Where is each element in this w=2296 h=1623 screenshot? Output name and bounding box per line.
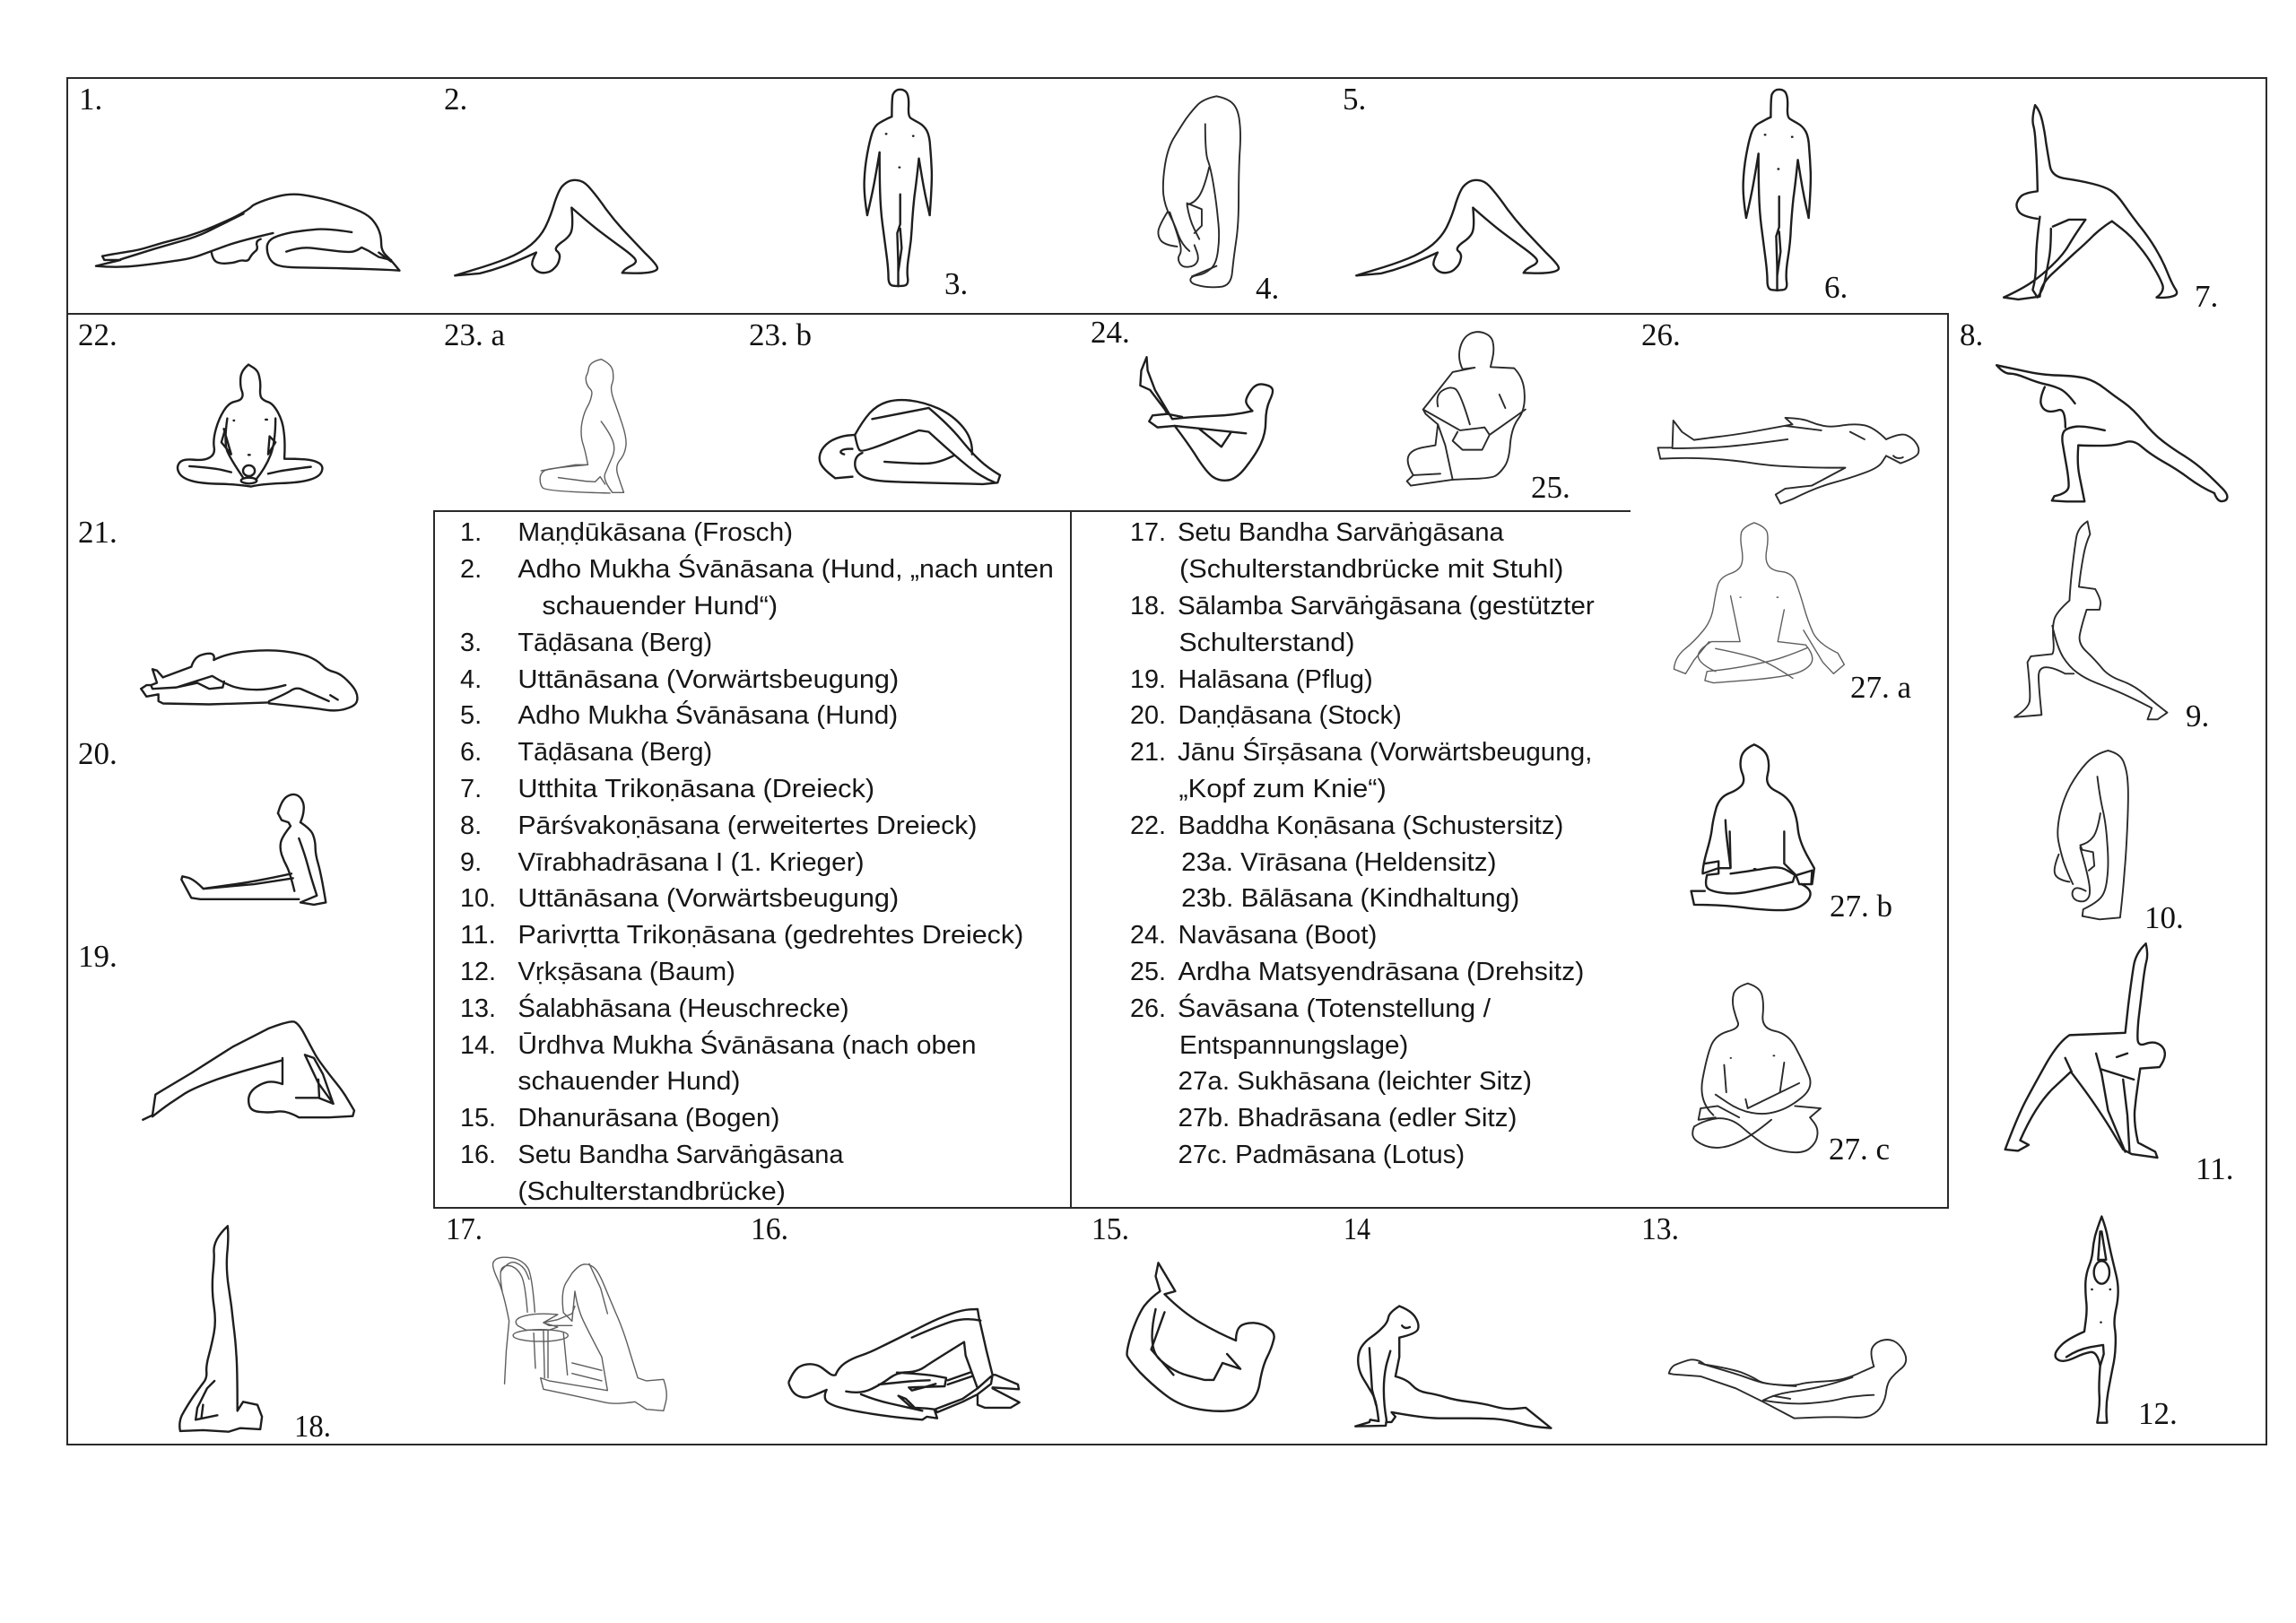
legend column right: (Schulterstandbrücke mit Stuhl): [1179, 555, 1563, 584]
figure 11: Parivrtta Trikonasana: [2005, 943, 2165, 1158]
legend column right: 18.: [1130, 592, 1166, 621]
legend column right: Baddha Koṇāsana (Schustersitz): [1178, 812, 1563, 840]
label 11: 11.: [2196, 1151, 2233, 1186]
figure 8: Parsvakonasana: [1996, 365, 2227, 501]
legend column left: Adho Mukha Śvānāsana (Hund, „nach unten: [517, 553, 1054, 584]
legend column left: 2.: [460, 555, 482, 584]
legend column left: 6.: [460, 738, 482, 767]
legend column left: Utthita Trikoṇāsana (Dreieck): [517, 775, 874, 803]
figure 23b: Balasana: [820, 400, 1000, 484]
legend column left: schauender Hund“): [542, 592, 778, 621]
legend column left: Parivṛtta Trikoṇāsana (gedrehtes Dreieck): [517, 921, 1023, 950]
figure 20: Dandasana: [181, 794, 326, 905]
label 15: 15.: [1091, 1211, 1129, 1246]
figure 14: Urdhva Mukha Svanasana: [1355, 1306, 1551, 1428]
figure 23a: Virasana: [540, 360, 626, 493]
label 18: 18.: [294, 1409, 331, 1444]
label 16: 16.: [751, 1211, 788, 1246]
figure 7: Utthita Trikonasana: [2004, 105, 2177, 299]
legend column right: Daṇḍāsana (Stock): [1178, 701, 1402, 730]
label 26: 26.: [1641, 317, 1681, 352]
legend column left: Vṛkṣāsana (Baum): [517, 958, 735, 986]
legend column left: 11.: [460, 921, 496, 950]
legend column right: Ardha Matsyendrāsana (Drehsitz): [1178, 958, 1584, 986]
legend column right: 20.: [1130, 701, 1166, 730]
legend column right: 23a. Vīrāsana (Heldensitz): [1181, 848, 1496, 877]
figure 16: Setu Bandha Sarvangasana: [788, 1309, 1020, 1419]
label 25: 25.: [1531, 470, 1570, 505]
legend column left: 12.: [460, 958, 496, 986]
label 14: 14: [1344, 1211, 1370, 1246]
label 27c: 27. c: [1829, 1132, 1890, 1167]
legend column right: 19.: [1130, 665, 1166, 694]
legend column left: 4.: [460, 665, 482, 694]
legend column right: 26.: [1130, 994, 1166, 1023]
legend column right: Schulterstand): [1178, 629, 1354, 657]
figure 27c: Padmasana: [1692, 984, 1821, 1152]
label 13: 13.: [1641, 1211, 1679, 1246]
label 23b: 23. b: [749, 317, 812, 352]
legend column right: 27b. Bhadrāsana (edler Sitz): [1178, 1104, 1517, 1133]
legend column left: Pārśvakoṇāsana (erweitertes Dreieck): [517, 812, 977, 840]
legend column left: 7.: [460, 775, 482, 803]
figure 10: Uttanasana: [2055, 751, 2128, 919]
legend column right: [1130, 518, 1595, 1169]
label 9: 9.: [2186, 699, 2209, 733]
label 20: 20.: [78, 736, 117, 771]
label 4: 4.: [1256, 271, 1279, 306]
legend column right: 23b. Bālāsana (Kindhaltung): [1181, 884, 1519, 913]
figure 9: Virabhadrasana I: [2014, 521, 2167, 719]
label 24: 24.: [1091, 315, 1130, 350]
legend column right: 21.: [1130, 738, 1166, 767]
label 27b: 27. b: [1830, 889, 1892, 924]
legend column left: Uttānāsana (Vorwärtsbeugung): [517, 884, 899, 913]
figure 4: Uttanasana: [1158, 96, 1240, 287]
figure 26: Savasana: [1658, 418, 1918, 504]
legend column right: Jānu Śīrṣāsana (Vorwärtsbeugung,: [1178, 736, 1592, 767]
legend column left: 13.: [460, 994, 496, 1023]
figure 13: Salabhasana: [1669, 1340, 1906, 1419]
label 27a: 27. a: [1850, 670, 1912, 705]
panel: legend of asana names: [460, 518, 1595, 1206]
label 23a: 23. a: [444, 317, 506, 352]
legend column right: Navāsana (Boot): [1178, 921, 1377, 950]
label 21: 21.: [78, 515, 117, 550]
legend column left: (Schulterstandbrücke): [517, 1177, 786, 1206]
legend column left: Adho Mukha Śvānāsana (Hund): [517, 699, 898, 730]
legend column left: Śalabhāsana (Heuschrecke): [517, 993, 849, 1023]
figure 2: Adho Mukha Svanasana: [455, 180, 657, 275]
legend column left: Uttānāsana (Vorwärtsbeugung): [517, 665, 899, 694]
legend column left: Maṇḍūkāsana (Frosch): [517, 518, 793, 547]
legend column left: 16.: [460, 1141, 496, 1169]
legend column left: Dhanurāsana (Bogen): [517, 1104, 779, 1133]
legend column right: Setu Bandha Sarvāṅgāsana: [1178, 518, 1505, 547]
legend column right: Halāsana (Pflug): [1178, 665, 1373, 694]
legend column right: „Kopf zum Knie“): [1178, 775, 1387, 803]
label 6: 6.: [1824, 270, 1848, 305]
legend column left: 5.: [460, 701, 482, 730]
legend column right: Entspannungslage): [1179, 1031, 1408, 1060]
legend column left: Ūrdhva Mukha Śvānāsana (nach oben: [517, 1029, 976, 1060]
figure 3: Tadasana: [865, 90, 932, 286]
figure 25: Ardha Matsyendrasana: [1407, 332, 1526, 486]
legend column left: 15.: [460, 1104, 496, 1133]
figure 19: Halasana: [143, 1021, 354, 1120]
legend column left: Vīrabhadrāsana I (1. Krieger): [517, 848, 865, 877]
legend column left: Setu Bandha Sarvāṅgāsana: [517, 1141, 844, 1169]
legend column left: 10.: [460, 884, 496, 913]
legend column left: [460, 518, 1054, 1206]
figure 27b: Bhadrasana: [1692, 744, 1814, 910]
figure 18: Salamba Sarvangasana: [179, 1226, 262, 1432]
label 17: 17.: [446, 1211, 483, 1246]
label 22: 22.: [78, 317, 117, 352]
legend column right: Śavāsana (Totenstellung /: [1178, 993, 1492, 1023]
label 12: 12.: [2138, 1396, 2178, 1431]
legend column left: schauender Hund): [517, 1067, 740, 1096]
legend column right: 24.: [1130, 921, 1166, 950]
legend column right: 17.: [1130, 518, 1166, 547]
label 2: 2.: [444, 82, 467, 117]
label 8: 8.: [1960, 317, 1983, 352]
figure 24: Navasana: [1140, 357, 1273, 481]
figure 6: Tadasana: [1744, 90, 1811, 291]
figure 27a: Sukhasana: [1674, 523, 1844, 683]
figure 15: Dhanurasana: [1127, 1263, 1274, 1411]
figure 21: Janu Sirsasana: [141, 650, 357, 710]
figure 5: Adho Mukha Svanasana: [1356, 180, 1559, 275]
legend column left: 3.: [460, 629, 482, 657]
legend column left: 14.: [460, 1031, 496, 1060]
legend column right: 22.: [1130, 812, 1166, 840]
legend column right: Sālamba Sarvāṅgāsana (gestützter: [1178, 592, 1595, 621]
label 10: 10.: [2144, 900, 2184, 935]
label 3: 3.: [944, 266, 968, 301]
figure 17: Setu Bandha Sarvangasana with chair: [493, 1257, 666, 1410]
figure 1: Mandukasana: [96, 195, 399, 271]
legend column left: 8.: [460, 812, 482, 840]
label 7: 7.: [2195, 279, 2218, 314]
figure 12: Vrksasana: [2056, 1217, 2118, 1423]
legend column left: Tāḍāsana (Berg): [517, 738, 712, 767]
legend column right: 27c. Padmāsana (Lotus): [1178, 1141, 1465, 1169]
legend column left: 9.: [460, 848, 482, 877]
legend column right: 27a. Sukhāsana (leichter Sitz): [1178, 1067, 1532, 1096]
legend column left: 1.: [460, 518, 482, 547]
figure 22: Baddha Konasana: [178, 365, 322, 487]
label 19: 19.: [78, 939, 117, 974]
legend column left: Tāḍāsana (Berg): [517, 629, 712, 657]
legend column right: 25.: [1130, 958, 1166, 986]
label 1: 1.: [79, 82, 102, 117]
label 5: 5.: [1343, 82, 1366, 117]
